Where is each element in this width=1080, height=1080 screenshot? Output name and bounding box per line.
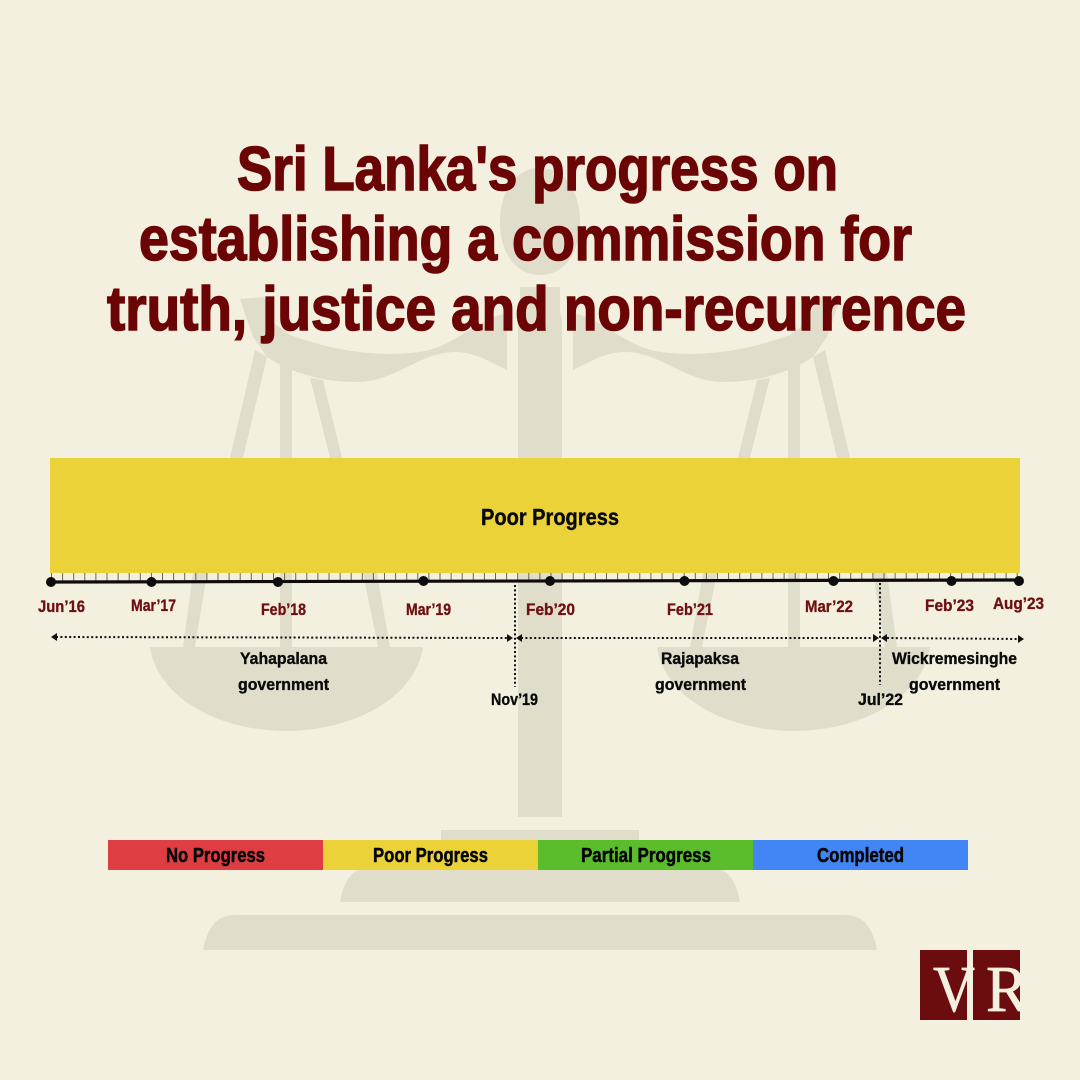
date labels: Feb’20 — [526, 600, 575, 619]
government labels: government — [238, 675, 329, 694]
date labels: Feb’18 — [261, 600, 306, 619]
government labels: government — [909, 675, 1000, 694]
government labels: Jul’22 — [858, 690, 903, 709]
date labels: Mar’19 — [406, 600, 451, 619]
title: Sri Lanka's progress on — [237, 135, 838, 204]
government labels: Nov’19 — [491, 690, 538, 709]
title: establishing a commission for — [139, 205, 912, 274]
date labels: Feb’21 — [667, 600, 713, 619]
government labels: Rajapaksa — [661, 649, 739, 668]
date labels: Feb’23 — [925, 596, 974, 615]
background icon: scales of justice — [150, 168, 930, 950]
government labels: Yahapalana — [240, 649, 327, 668]
date labels — [38, 594, 1044, 619]
date labels: Jun’16 — [38, 597, 85, 616]
government labels — [238, 649, 1017, 709]
government labels: government — [655, 675, 746, 694]
government period arrows — [51, 583, 1024, 687]
legend: Poor Progress — [373, 845, 488, 867]
title — [107, 135, 966, 344]
timeline axis — [46, 576, 1024, 587]
status bar: poor progress — [50, 458, 1020, 573]
logo: VR: V — [933, 953, 975, 1026]
date labels: Aug’23 — [993, 594, 1044, 613]
logo: VR — [920, 950, 1034, 1026]
legend: Completed — [817, 845, 904, 867]
title: truth, justice and non-recurrence — [107, 275, 966, 344]
date labels: Mar’17 — [131, 596, 176, 615]
legend: Partial Progress — [581, 845, 711, 867]
government labels: Wickremesinghe — [892, 649, 1017, 668]
logo: VR: R — [986, 953, 1028, 1026]
status bar: poor progress: Poor Progress — [481, 504, 619, 530]
legend — [108, 840, 968, 870]
date labels: Mar’22 — [805, 597, 853, 616]
legend: No Progress — [166, 845, 265, 867]
